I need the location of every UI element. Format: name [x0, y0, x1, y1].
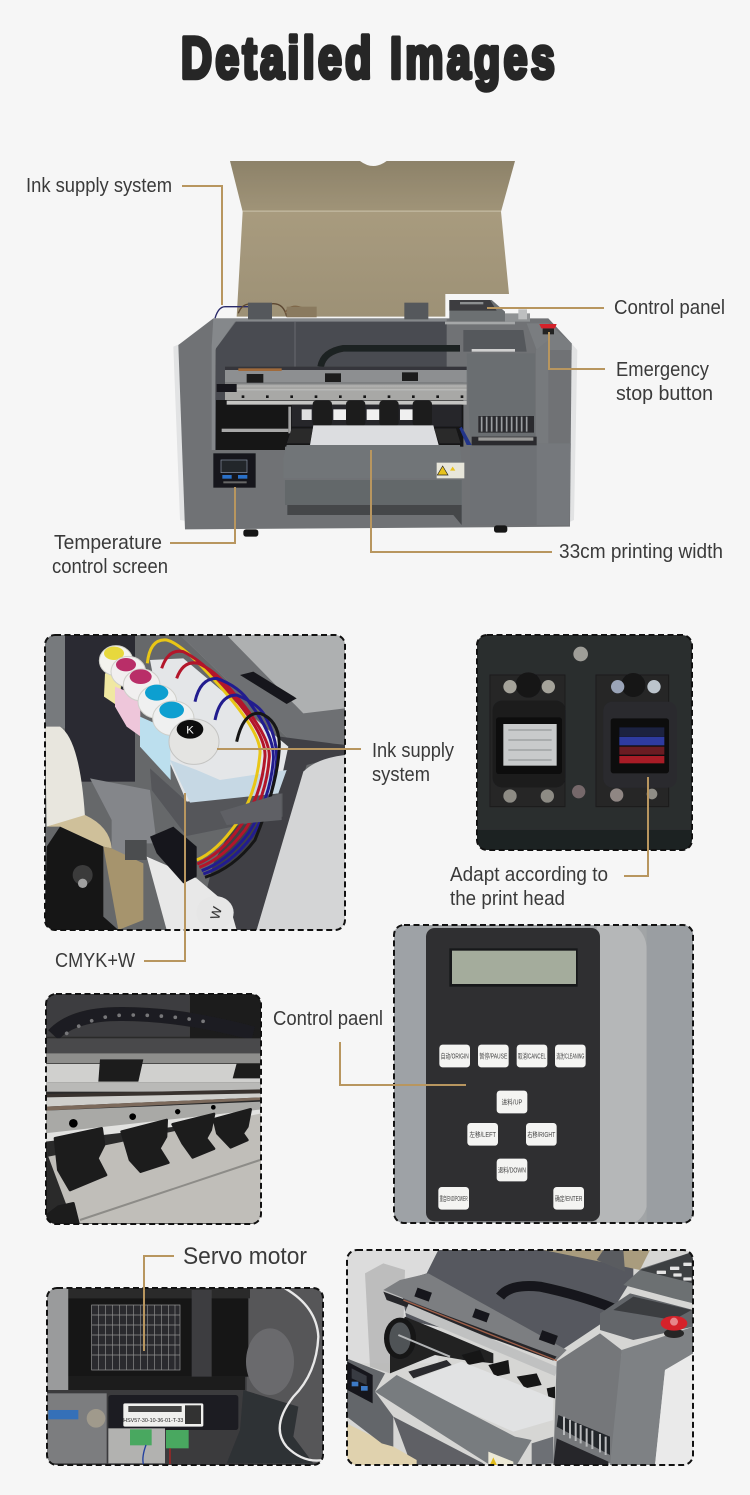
- callout: ink supply system detail: [217, 740, 454, 786]
- emergency stop: [661, 1316, 687, 1338]
- callout: ink supply system: [26, 175, 222, 305]
- rail clips: [98, 1059, 143, 1082]
- callout: ink supply system: Ink supply system: [26, 175, 172, 197]
- callout: 33cm printing width: [371, 450, 723, 563]
- keypad board: [426, 928, 600, 1221]
- keypad buttons: 确定/ENTER: [555, 1194, 582, 1203]
- right column: [470, 323, 572, 525]
- panel border: ink bottles: [45, 635, 345, 930]
- keypad buttons: 清洗/CLEANING: [556, 1051, 584, 1060]
- warning label: [488, 1452, 514, 1465]
- keypad buttons: 右移/RIGHT: [527, 1130, 556, 1139]
- rollers: [45, 1109, 251, 1223]
- pinch rollers: [313, 401, 432, 426]
- keypad buttons: 进料/UP: [502, 1098, 523, 1107]
- callout: adapt according to the print head: [450, 777, 648, 910]
- callout: temperature control screen: Temperature: [54, 532, 162, 554]
- right housing: [532, 1293, 693, 1465]
- keypad buttons: 退料/DOWN: [498, 1166, 526, 1175]
- callout: control paenl: [273, 1008, 466, 1085]
- temperature panel: [213, 453, 256, 488]
- panel border: angled view: [347, 1250, 693, 1465]
- paper: [403, 1362, 553, 1432]
- white side panels: [173, 340, 577, 523]
- carriage rail: [383, 1273, 567, 1360]
- terminal blocks: [130, 1429, 189, 1448]
- callout: ink supply system detail: Ink supply: [372, 740, 454, 762]
- callout: CMYK+W: [55, 793, 185, 972]
- side circle: [246, 1328, 294, 1395]
- feet: [243, 525, 507, 537]
- ink tubes behind lid: [215, 304, 317, 318]
- carriage rail: [217, 367, 467, 405]
- panel: control panel photo: [390, 920, 700, 1230]
- panel border: servo motor: [47, 1288, 323, 1465]
- panel border: print head mount: [477, 635, 692, 850]
- emergency stop button: [539, 324, 557, 334]
- front tray: [283, 445, 463, 525]
- top control panel: [445, 300, 530, 324]
- clamp: [220, 793, 282, 825]
- callout: control paenl: Control paenl: [273, 1008, 383, 1030]
- callout: emergency stop button: Emergency: [616, 359, 709, 381]
- white cable: [280, 1288, 323, 1461]
- right head cap: [610, 673, 669, 802]
- keypad buttons: 暂停/PAUSE: [479, 1051, 508, 1060]
- panel: printer angled view photo: [347, 1250, 693, 1465]
- panel: servo motor photo: [47, 1288, 323, 1465]
- machine body: [178, 318, 572, 529]
- printer overview photo: [173, 161, 577, 537]
- left wiring: [47, 1393, 107, 1463]
- keypad buttons: [438, 1045, 586, 1210]
- callout: temperature control screen: [52, 487, 235, 578]
- panel: ink bottles photo: W: [207, 905, 225, 921]
- hinges: [248, 303, 428, 319]
- driver: HSV57-30-10-36-01-T-33: [123, 1418, 183, 1424]
- ink caps: K: [186, 724, 194, 736]
- roller assembly: [390, 1317, 493, 1373]
- callout: emergency stop button: [549, 332, 713, 405]
- keypad buttons: 重启/END/POWER: [440, 1194, 468, 1203]
- title: Detailed Images: [181, 26, 555, 91]
- keypad buttons: 自动/ORIGIN: [441, 1051, 469, 1060]
- callout: servo motor: [144, 1243, 307, 1351]
- top control panel: [623, 1252, 693, 1303]
- temperature panel: [347, 1362, 373, 1403]
- cable chain: [321, 348, 460, 367]
- tray: [150, 768, 282, 836]
- driver: [108, 1395, 238, 1430]
- keypad buttons: 左移/LEFT: [469, 1130, 497, 1139]
- keypad buttons: 取消/CANCEL: [518, 1051, 546, 1060]
- ink caps: [99, 646, 219, 764]
- paper bed: [48, 1113, 262, 1223]
- callout: 33cm printing width: 33cm printing width: [559, 541, 723, 563]
- callout: ink supply system detail: system: [372, 764, 430, 786]
- warning label: [437, 463, 464, 478]
- bottle bodies: [150, 658, 288, 802]
- motor body: [68, 1290, 248, 1390]
- panel: print head mount photo: [477, 635, 692, 850]
- cable chain: [500, 1286, 613, 1308]
- callout: control panel: Control panel: [614, 297, 725, 319]
- cable chain: [53, 1014, 253, 1035]
- head housing: [459, 330, 537, 445]
- panel border: carriage rollers: [46, 994, 261, 1224]
- open lid: [230, 161, 515, 317]
- paper: [310, 425, 439, 445]
- interior cavity: [215, 322, 463, 450]
- callout: CMYK+W: CMYK+W: [55, 950, 135, 972]
- panel: carriage rollers photo: [40, 990, 267, 1230]
- callout: adapt according to the print head: the print head: [450, 888, 565, 910]
- feed mechanism: [222, 405, 462, 433]
- callout: adapt according to the print head: Adapt according to: [450, 864, 608, 886]
- interior: [400, 1250, 633, 1353]
- panel: ink bottles photo: [40, 630, 360, 935]
- ink tubes: [147, 640, 279, 877]
- waste bottle: [147, 857, 237, 930]
- panel border: control panel: [394, 925, 693, 1223]
- front tray: [375, 1375, 532, 1465]
- callout: emergency stop button: stop button: [616, 383, 713, 405]
- callout: temperature control screen: control screen: [52, 556, 168, 578]
- left head cap: [493, 672, 565, 803]
- callout: servo motor: Servo motor: [183, 1243, 307, 1270]
